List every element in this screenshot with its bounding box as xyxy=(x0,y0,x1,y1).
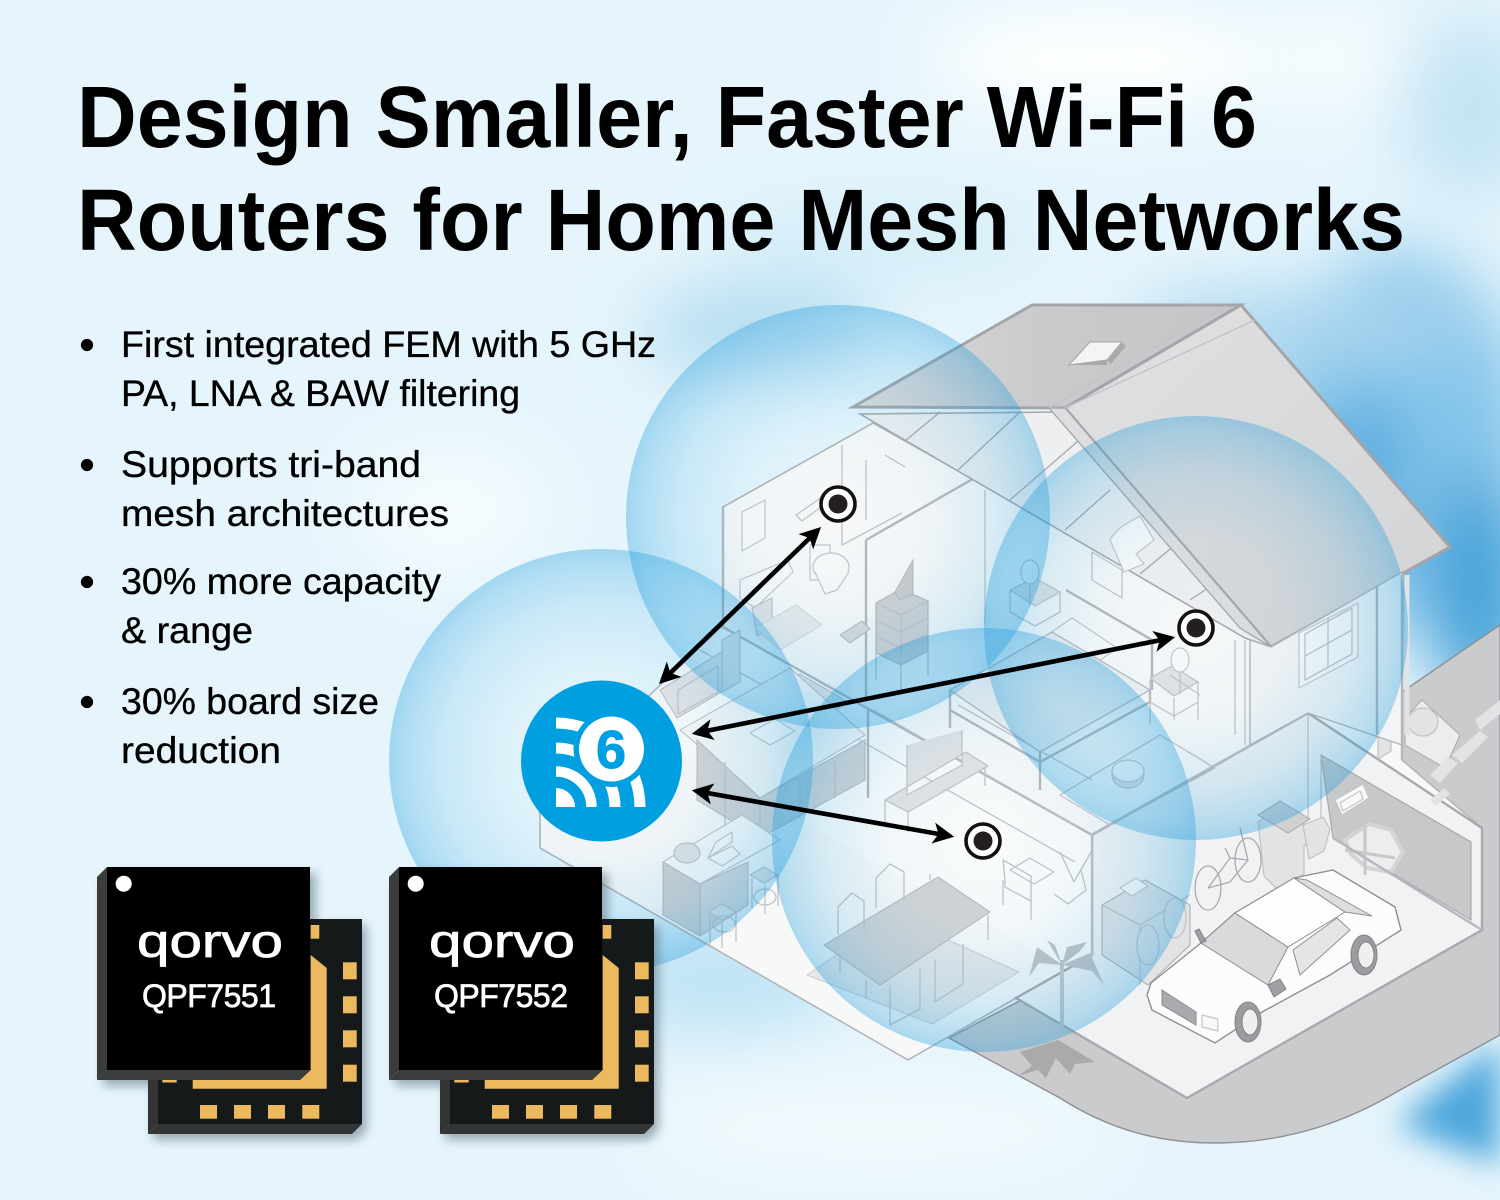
bathroom furniture xyxy=(740,445,905,650)
garage xyxy=(1016,713,1482,1098)
chip: QPF7551: QPF7551 xyxy=(142,978,276,1014)
chip: QPF7552: qorvo xyxy=(429,915,575,967)
arrow: router to right node xyxy=(696,638,1171,733)
feature bullet list: First integrated FEM with 5 GHz xyxy=(121,324,656,365)
bike and bins xyxy=(1195,801,1330,910)
title xyxy=(77,69,1405,269)
roof xyxy=(853,305,1450,647)
house footprint xyxy=(540,423,1482,1098)
coverage bubble: top node xyxy=(626,305,1050,729)
feature bullet list: 30% more capacity xyxy=(121,561,441,602)
attic xyxy=(860,412,1271,647)
laundry xyxy=(1102,878,1190,985)
feature bullet list xyxy=(81,324,656,771)
air conditioner and stones xyxy=(1378,700,1500,806)
divider walls xyxy=(660,472,1308,968)
feature bullet list: reduction xyxy=(121,730,281,771)
illustration: cutaway house xyxy=(540,305,1500,1098)
icon: Wi-Fi 6 badge xyxy=(521,680,682,842)
mesh node: right xyxy=(1179,611,1213,645)
title: Routers for Home Mesh Networks xyxy=(77,172,1405,269)
arrow: router to top node xyxy=(662,530,818,681)
palm tree and shadow xyxy=(1018,940,1104,1078)
mesh node: top xyxy=(821,487,855,521)
icon: Wi-Fi 6 badge: 6 xyxy=(596,720,626,780)
title: Design Smaller, Faster Wi-Fi 6 xyxy=(77,69,1257,166)
feature bullet list: & range xyxy=(121,610,253,651)
feature bullet list: mesh architectures xyxy=(121,493,449,534)
feature bullet list: 30% board size xyxy=(121,681,379,722)
dining and living room xyxy=(807,835,1092,1025)
mesh node: centre xyxy=(966,824,1000,858)
chip: QPF7552 xyxy=(389,867,659,1140)
exterior wall and window xyxy=(1250,572,1407,760)
ground and driveway xyxy=(949,625,1500,1143)
coverage bubble: router xyxy=(389,549,813,973)
kitchen xyxy=(660,630,988,948)
arrow: router to centre node xyxy=(696,791,950,836)
bedroom furniture xyxy=(876,552,1215,825)
coverage bubble: centre node xyxy=(772,628,1196,1052)
chip: QPF7551 xyxy=(97,867,367,1140)
feature bullet list: Supports tri-band xyxy=(121,444,421,485)
feature bullet list: PA, LNA & BAW filtering xyxy=(121,373,520,414)
coverage bubble: right node xyxy=(984,416,1408,840)
car xyxy=(1147,870,1401,1043)
chip: QPF7551: qorvo xyxy=(137,915,283,967)
chip: QPF7552: QPF7552 xyxy=(434,978,568,1014)
